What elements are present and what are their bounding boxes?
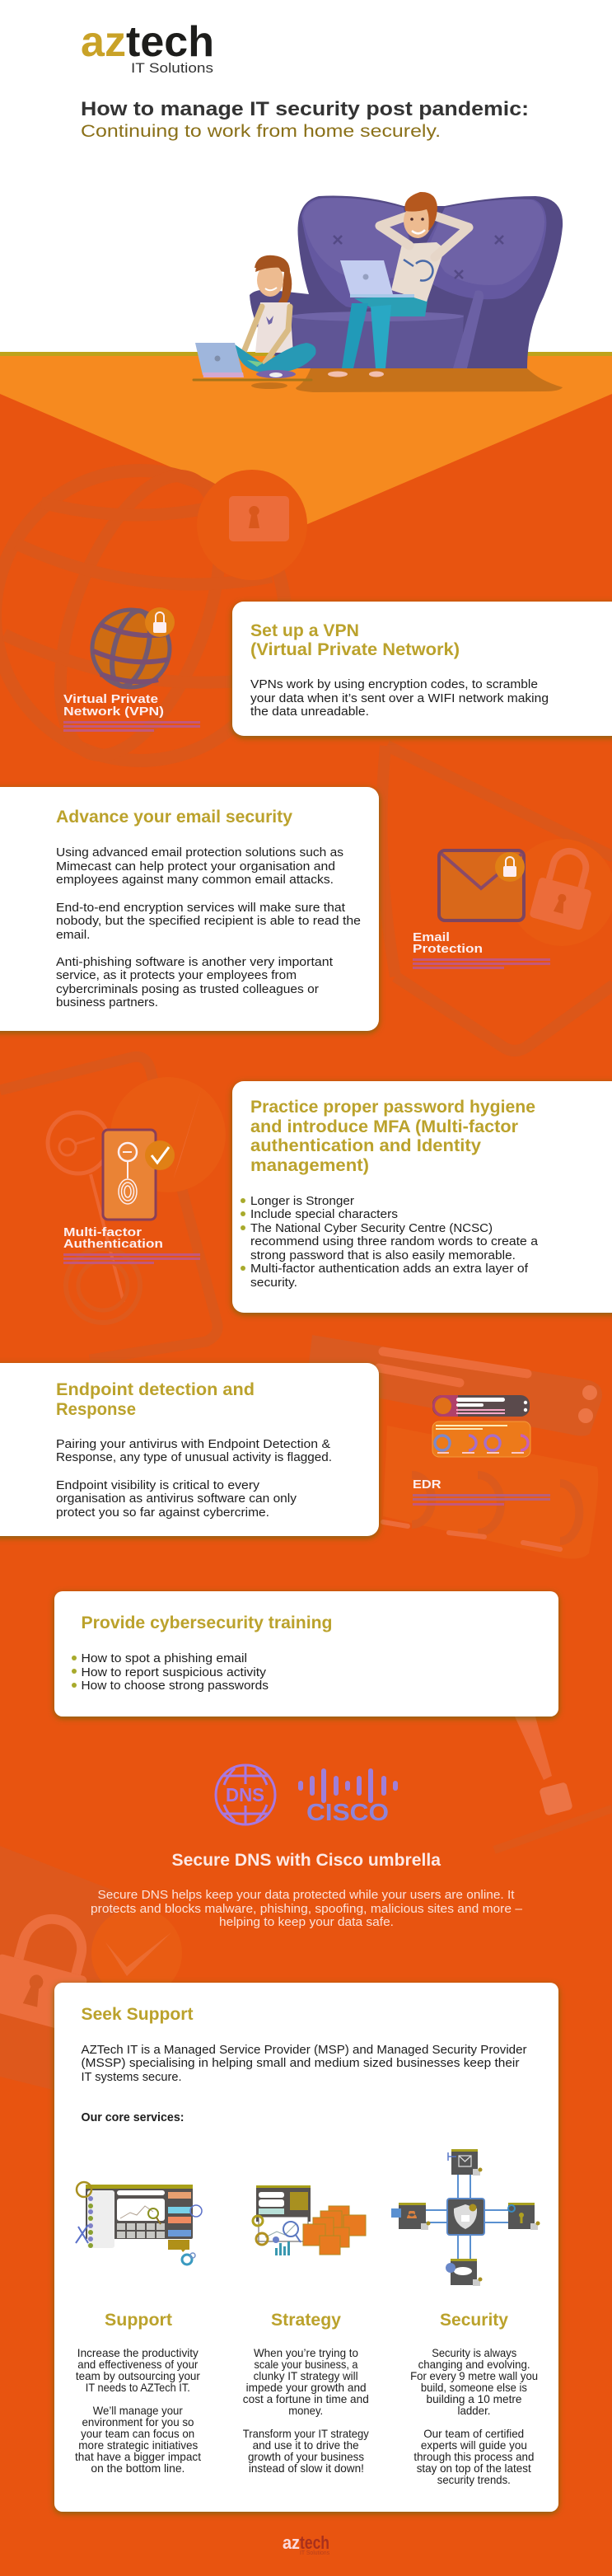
column: security: Our team of certified	[423, 2428, 524, 2440]
column: security: through this process and	[413, 2451, 534, 2463]
column: strategy: cost a fortune in time and	[243, 2393, 369, 2405]
footer logo: az	[283, 2532, 300, 2553]
background decoration: envelope and lock	[382, 746, 612, 1051]
text: intro: (MSSP) specialising in helping small and medium sized businesses keep their	[81, 2057, 520, 2070]
panel: endpoint card	[0, 1363, 379, 1536]
icon: security network	[391, 2149, 540, 2286]
column: support: Support	[105, 2311, 172, 2330]
text: email body: Using advanced email protection solutions such as	[56, 846, 343, 859]
label: VPN: Network (VPN)	[63, 705, 164, 719]
text: secure DNS body: protects and blocks malware, phishing, spoofing, malicious sites and more –	[91, 1903, 523, 1916]
column: security: Security	[440, 2311, 508, 2330]
heading: secure DNS: Secure DNS with Cisco umbrella	[171, 1851, 441, 1870]
label: email protection: Protection	[413, 943, 483, 956]
column: support: that have a bigger impact	[75, 2451, 201, 2463]
column: strategy: and use it to drive the	[253, 2439, 359, 2452]
column: security: building a 10 metre	[427, 2393, 522, 2405]
list: training topics: How to spot a phishing email	[81, 1652, 247, 1665]
text: email body: cybercriminals posing as trusted colleagues or	[56, 983, 319, 996]
column: strategy	[243, 2311, 369, 2475]
column: security: Security is always	[432, 2347, 516, 2359]
text: VPN body	[250, 678, 549, 719]
icon: strategy dashboard	[253, 2185, 366, 2255]
logo: Cisco: CISCO	[306, 1800, 389, 1826]
icon: DNS globe: DNS	[226, 1784, 264, 1806]
column: security: build, someone else is	[421, 2382, 527, 2394]
list: password tips: Multi-factor authentication adds an extra layer of	[250, 1262, 529, 1276]
heading: password	[250, 1098, 535, 1175]
label: email protection: Email	[413, 931, 450, 944]
heading: training: Provide cybersecurity training	[81, 1614, 333, 1632]
footer logo	[283, 2532, 329, 2556]
panel: VPN card	[232, 602, 612, 736]
column: support: your team can focus on	[81, 2428, 194, 2440]
icon: email envelope and lock	[439, 850, 525, 920]
logo: tech	[126, 18, 214, 66]
column: security: stay on top of the latest	[417, 2462, 531, 2475]
list: password tips: Include special characters	[250, 1208, 398, 1221]
logo: az	[81, 18, 126, 66]
list: training topics: How to choose strong passwords	[81, 1679, 269, 1693]
floor	[0, 352, 612, 525]
logo: IT Solutions	[131, 60, 213, 76]
column: support: environment for you so	[82, 2416, 194, 2428]
heading: seek support: Seek Support	[81, 2005, 193, 2024]
sofa shadow	[296, 368, 563, 392]
column: security: changing and evolving.	[418, 2358, 530, 2371]
text: endpoint body: Endpoint visibility is critical to every	[56, 1479, 260, 1492]
label: EDR: EDR	[413, 1478, 441, 1492]
text: endpoint body: protect you so far against cybercrime.	[56, 1506, 269, 1520]
column: strategy: impede your growth and	[246, 2382, 367, 2394]
column: support: and effectiveness of your	[77, 2358, 199, 2371]
text: email body: Anti-phishing software is another very important	[56, 956, 333, 969]
subheading: core services: Our core services:	[81, 2111, 185, 2124]
column: security: security trends.	[437, 2474, 511, 2486]
heading: VPN: (Virtual Private Network)	[250, 640, 460, 659]
man	[328, 192, 469, 377]
column: support: more strategic initiatives	[78, 2439, 198, 2452]
background decoration: EDR panels	[306, 1335, 602, 1559]
text: secure DNS body: Secure DNS helps keep your data protected while your users are online. It	[97, 1889, 514, 1902]
text: email body: Mimecast can help protect your organisation and	[56, 860, 335, 873]
text: intro	[81, 2044, 527, 2084]
column: support	[75, 2311, 201, 2475]
column: support: team by outsourcing your	[76, 2370, 200, 2382]
heading: VPN: Set up a VPN	[250, 621, 359, 640]
column: strategy: When you’re trying to	[254, 2347, 358, 2359]
panel: training card	[54, 1591, 558, 1717]
column: support: Increase the productivity	[77, 2347, 199, 2359]
heading: endpoint	[56, 1380, 255, 1419]
column: security	[410, 2311, 538, 2486]
text: email body: employees against many common email attacks.	[56, 873, 334, 887]
text: secure DNS body: helping to keep your data safe.	[219, 1916, 394, 1929]
label: VPN: Virtual Private	[63, 693, 158, 706]
sofa	[250, 196, 563, 368]
background decoration: phone, key and check	[0, 1056, 226, 1360]
label: EDR	[413, 1478, 550, 1506]
heading: VPN	[250, 621, 460, 659]
logo	[81, 18, 214, 76]
column: support: We’ll manage your	[93, 2405, 183, 2417]
label: MFA: Authentication	[63, 1238, 163, 1251]
column: support: on the bottom line.	[91, 2462, 185, 2475]
list: password tips: strong password that is also easily memorable.	[250, 1249, 516, 1262]
heading: endpoint: Endpoint detection and	[56, 1380, 255, 1399]
white header area	[0, 0, 612, 352]
column: strategy: money.	[288, 2405, 323, 2417]
column: security: experts will guide you	[421, 2439, 527, 2452]
text: email body: business partners.	[56, 996, 158, 1009]
icon: MFA phone	[103, 1130, 175, 1220]
text: VPN body: the data unreadable.	[250, 705, 369, 719]
text: VPN body: your data when it’s sent over a WIFI network making	[250, 692, 549, 705]
text: endpoint body: organisation as antivirus software can only	[56, 1492, 297, 1506]
text: VPN body: VPNs work by using encryption codes, to scramble	[250, 678, 538, 691]
text: endpoint body	[56, 1438, 332, 1520]
list: password tips	[241, 1195, 539, 1290]
panel: email card	[0, 787, 379, 1031]
label: email protection	[413, 931, 550, 969]
text: intro: IT systems secure.	[81, 2071, 181, 2084]
column: strategy: instead of slow it down!	[249, 2462, 364, 2475]
column: support: IT needs to AZTech IT.	[86, 2382, 190, 2394]
icon: EDR dashboard	[432, 1395, 530, 1457]
heading: email: Advance your email security	[56, 808, 292, 827]
panel: password card	[232, 1081, 612, 1313]
list: password tips: The National Cyber Security Centre (NCSC)	[250, 1222, 493, 1235]
icon: DNS globe	[216, 1765, 275, 1824]
text: email body	[56, 846, 361, 1009]
text: endpoint body: Response, any type of unusual activity is flagged.	[56, 1451, 332, 1464]
footer logo: tech	[300, 2532, 329, 2553]
background decoration: warning sign	[494, 1717, 612, 1850]
heading: password: authentication and Identity	[250, 1136, 481, 1155]
title: How to manage IT security post pandemic:	[81, 98, 529, 120]
text: email body: email.	[56, 929, 91, 942]
column: strategy: scale your business, a	[254, 2358, 358, 2371]
list: password tips: recommend using three random words to create a	[250, 1235, 539, 1248]
column: security: For every 9 metre wall you	[410, 2370, 538, 2382]
text: email body: nobody, but the specified recipient is able to read the	[56, 915, 361, 928]
text: secure DNS body	[91, 1889, 523, 1929]
column: security: ladder.	[458, 2405, 491, 2417]
heading: endpoint: Response	[56, 1400, 136, 1419]
column: strategy: growth of your business	[248, 2451, 364, 2463]
label: MFA: Multi-factor	[63, 1226, 142, 1239]
subtitle: Continuing to work from home securely.	[81, 122, 441, 141]
footer logo: IT Solutions	[300, 2550, 329, 2556]
illustration: sofa and people	[194, 192, 563, 392]
background decoration: lock and check	[0, 1846, 182, 2093]
column: strategy: Transform your IT strategy	[243, 2428, 369, 2440]
column: strategy: clunky IT strategy will	[254, 2370, 358, 2382]
column: strategy: Strategy	[271, 2311, 341, 2330]
text: intro: AZTech IT is a Managed Service Provider (MSP) and Managed Security Provider	[81, 2044, 527, 2057]
logo: Cisco	[298, 1768, 398, 1826]
icon: VPN globe and lock	[92, 607, 175, 691]
text: email body: service, as it protects your employees from	[56, 969, 297, 982]
label: MFA	[63, 1226, 200, 1264]
list: training topics	[72, 1652, 269, 1693]
background decoration: globe and lock	[0, 455, 307, 776]
heading: password: Practice proper password hygiene	[250, 1098, 535, 1117]
heading: password: and introduce MFA (Multi-factor	[250, 1117, 518, 1136]
panel: seek support card	[54, 1983, 558, 2512]
text: endpoint body: Pairing your antivirus with Endpoint Detection &	[56, 1438, 330, 1451]
icon: support dashboard	[76, 2182, 202, 2265]
woman	[194, 255, 316, 389]
label: VPN	[63, 693, 200, 732]
heading: password: management)	[250, 1156, 369, 1175]
list: training topics: How to report suspicious activity	[81, 1666, 267, 1679]
list: password tips: Longer is Stronger	[250, 1195, 354, 1208]
list: password tips: security.	[250, 1276, 297, 1290]
text: email body: End-to-end encryption services will make sure that	[56, 902, 345, 915]
